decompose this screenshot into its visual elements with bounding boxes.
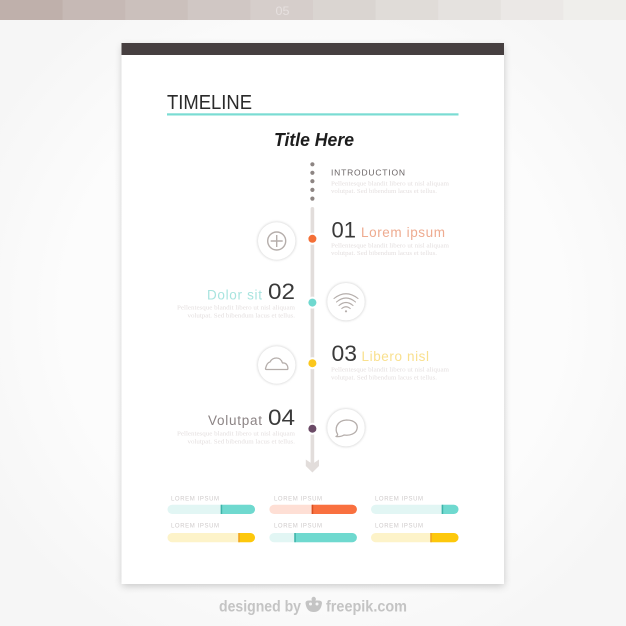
item 1 text: 01	[332, 218, 356, 243]
header bar	[122, 43, 504, 55]
item 4 text: Pellentesque blandit libero ut nisl aliquam	[177, 431, 295, 438]
item 2 text: volutpat. Sed bibendum lacus et tellus.	[188, 312, 295, 319]
item 2 text: Dolor sit	[207, 287, 262, 302]
bar row 2 col 1	[168, 524, 255, 542]
bar row 2 col 2: LOREM IPSUM	[274, 524, 322, 530]
item 3 icon: cloud	[257, 346, 296, 384]
subtitle: Title Here	[274, 129, 354, 150]
item 1 text: Pellentesque blandit libero ut nisl aliquam	[331, 243, 449, 250]
intro dots	[310, 162, 314, 201]
item 2 text: Pellentesque blandit libero ut nisl aliquam	[177, 304, 295, 311]
top swatch strip: 05	[276, 4, 290, 18]
item 1 icon: plus	[257, 222, 296, 260]
item 3 text: volutpat. Sed bibendum lacus et tellus.	[331, 374, 437, 381]
bar row 1 col 3: LOREM IPSUM	[375, 496, 423, 502]
item 1 text: volutpat. Sed bibendum lacus et tellus.	[331, 250, 437, 257]
item 3 text: 03	[332, 341, 357, 366]
timeline axis and arrow	[306, 207, 319, 472]
icon: freepik logo	[306, 597, 322, 612]
item 3 text: Pellentesque blandit libero ut nisl aliquam	[331, 367, 449, 374]
item 4 text: Volutpat	[208, 413, 262, 428]
footer credit: freepik.com	[326, 598, 407, 616]
item 1 marker	[306, 233, 318, 245]
item 4 text	[177, 405, 295, 445]
item 2 text: 02	[268, 279, 295, 304]
footer credit	[219, 597, 407, 616]
intro text: volutpat. Sed bibendum lacus et tellus.	[331, 188, 437, 195]
bar row 1 col 3	[371, 496, 458, 514]
bar row 2 col 2	[269, 524, 357, 542]
bar row 1 col 2	[269, 496, 357, 514]
item 4 marker	[306, 423, 318, 435]
page shadow	[122, 46, 504, 586]
intro text: INTRODUCTION	[331, 168, 405, 178]
item 4 text: volutpat. Sed bibendum lacus et tellus.	[188, 438, 295, 445]
item 4 text: 04	[268, 405, 295, 430]
panel: page	[122, 43, 504, 584]
item 3 marker	[306, 357, 318, 369]
item 2 marker	[306, 297, 318, 309]
progress bars	[168, 496, 458, 542]
intro text: Pellentesque blandit libero ut nisl aliquam	[331, 180, 449, 187]
item 1 text: Lorem ipsum	[361, 225, 445, 240]
item 1 text	[331, 218, 449, 257]
item 3 text	[331, 341, 449, 381]
item 2 icon: wifi	[326, 282, 366, 321]
item 2 text	[177, 279, 295, 319]
item 3 text: Libero nisl	[362, 349, 429, 364]
top swatch strip	[0, 0, 626, 20]
bar row 2 col 3	[371, 524, 458, 542]
bar row 1 col 1: LOREM IPSUM	[171, 496, 219, 502]
footer credit: designed by	[219, 598, 301, 616]
item 4 icon: speech bubble	[326, 408, 366, 447]
heading: TIMELINE	[167, 92, 252, 114]
intro text	[331, 168, 449, 195]
bar row 1 col 2: LOREM IPSUM	[274, 496, 322, 502]
bar row 2 col 3: LOREM IPSUM	[375, 524, 423, 530]
bar row 1 col 1	[168, 496, 255, 514]
bar row 2 col 1: LOREM IPSUM	[171, 524, 219, 530]
